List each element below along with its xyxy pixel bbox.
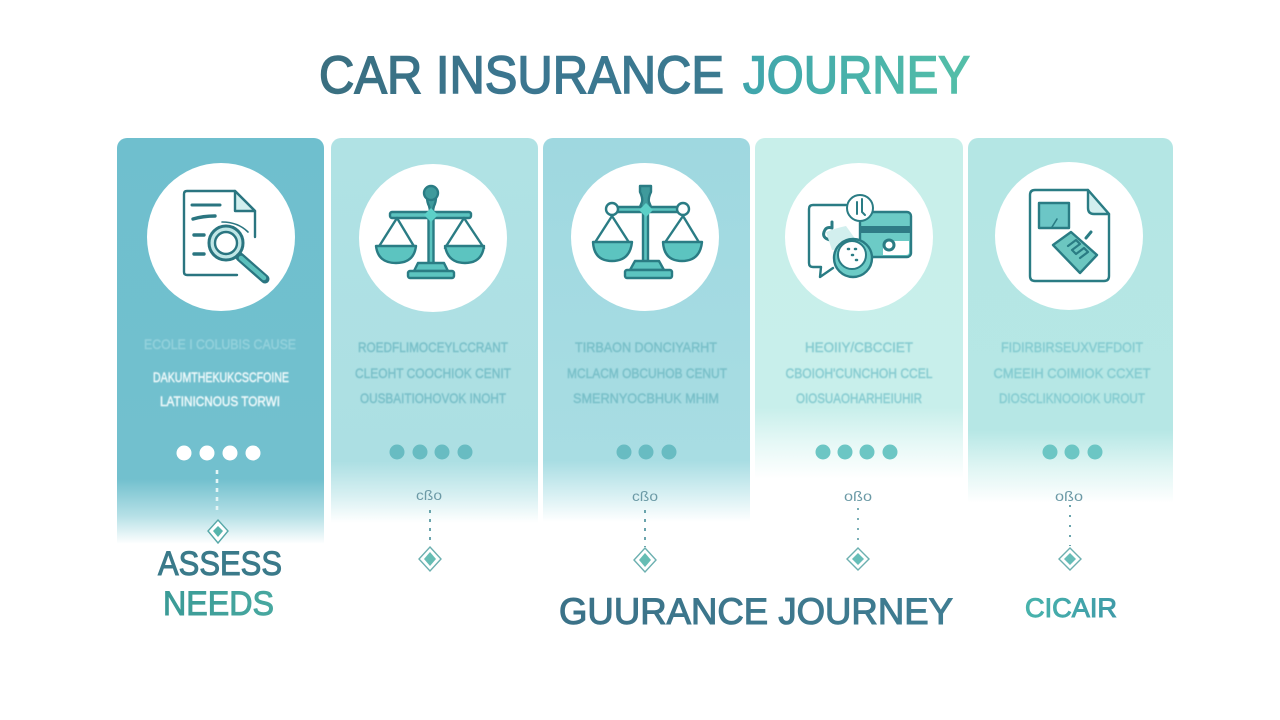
text block 4: CBOIOH'CUNCHOH CCEL: [786, 365, 933, 381]
text block 5: FIDIRBIRSEUXVEFDOIT: [1001, 339, 1143, 355]
connector 1: [208, 470, 228, 543]
panel: step 4: [755, 138, 963, 570]
text block 2: OUSBAITIOHOVOK INOHT: [360, 390, 506, 406]
panel background 5: [968, 138, 1173, 503]
text block 1: ECOLE I COLUBIS CAUSE: [144, 336, 296, 352]
label: cicair: CICAIR: [1025, 593, 1117, 623]
connector 2: [416, 487, 442, 571]
panel background 1: [117, 138, 324, 544]
progress dots 4: [816, 444, 898, 460]
connector 5: oßo: [1055, 488, 1083, 504]
progress dots 3: [616, 444, 676, 460]
text block 1: DAKUMTHEKUKCSCFOINE: [153, 369, 289, 385]
icon circle 4: [785, 163, 933, 311]
text block 2: ROEDFLIMOCEYLCCRANT: [358, 339, 508, 355]
panel: step 2: [331, 138, 538, 571]
label: assess needs: [158, 545, 282, 623]
icon circle 3: [571, 163, 719, 311]
label: assess needs: NEEDS: [163, 585, 274, 623]
text block 3: TIRBAON DONCIYARHT: [575, 339, 717, 355]
connector 2: cßo: [416, 487, 442, 503]
text block 3: [567, 339, 727, 406]
icon: speech bubble, credit card and coin: [809, 195, 911, 277]
text block 5: CMEEIH COIMIOK CCXET: [994, 365, 1151, 381]
panel background 3: [543, 138, 750, 522]
icon circle 1: [147, 163, 295, 311]
text block 4: HEOIIY/CBCCIET: [805, 339, 913, 355]
text block 3: SMERNYOCBHUK MHIM: [573, 390, 719, 406]
panel: step 1 assess needs: [117, 138, 324, 544]
title: JOURNEY: [743, 46, 970, 105]
icon circle 5: [995, 162, 1143, 310]
label: guurance journey: GUURANCE JOURNEY: [559, 591, 953, 632]
icon: balance scale with pivots: [593, 186, 702, 278]
text block 2: [355, 339, 511, 406]
text block 4: OIOSUAOHARHEIUHIR: [796, 390, 922, 406]
progress dots 2: [390, 444, 472, 460]
connector 3: cßo: [632, 488, 658, 504]
icon: document with magnifier: [184, 191, 265, 279]
text block 4: [786, 339, 933, 406]
label: assess needs: ASSESS: [158, 545, 282, 583]
panel: step 3: [543, 138, 750, 572]
text block 5: DIOSCLIKNOOIOK UROUT: [999, 390, 1145, 406]
connector 5: [1055, 488, 1083, 570]
text block 1: [144, 336, 296, 409]
text block 5: [994, 339, 1151, 406]
connector 4: [844, 488, 872, 570]
progress dots 5: [1042, 444, 1102, 460]
icon circle 2: [359, 164, 507, 312]
title: [319, 46, 970, 105]
panel: step 5: [968, 138, 1173, 570]
text block 1: LATINICNOUS TORWI: [160, 393, 280, 409]
text block 3: MCLACM OBCUHOB CENUT: [567, 365, 727, 381]
icon: balance scale: [376, 186, 484, 278]
panel background 4: [755, 138, 963, 493]
panel background 2: [331, 138, 538, 523]
progress dots 1: [176, 446, 260, 460]
connector 4: oßo: [844, 488, 872, 504]
connector 3: [632, 488, 658, 572]
icon: document with price tag: [1030, 190, 1109, 281]
text block 2: CLEOHT COOCHIOK CENIT: [355, 365, 511, 381]
title: CAR INSURANCE: [319, 46, 724, 105]
